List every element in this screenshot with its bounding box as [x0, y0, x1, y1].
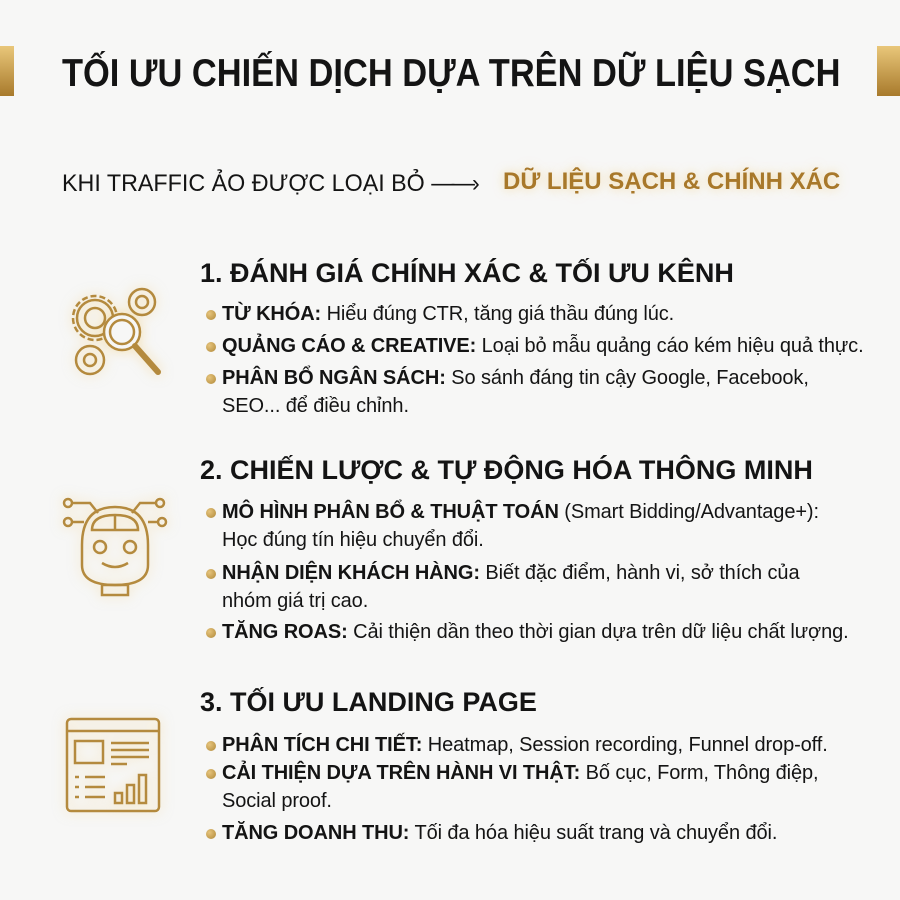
icon: browser dashboard	[60, 714, 166, 817]
icon: gears and magnifier	[68, 284, 164, 379]
section 2	[60, 454, 849, 643]
heading 1: 1. ĐÁNH GIÁ CHÍNH XÁC & TỐI ƯU KÊNH	[200, 258, 734, 288]
section 2: NHẬN DIỆN KHÁCH HÀNG: Biết đặc điểm, hành vi, sở thích của	[222, 562, 799, 584]
gold bar left	[0, 46, 14, 96]
section 3: Social proof.	[222, 790, 332, 812]
subtitle	[62, 164, 841, 197]
section 3: TĂNG DOANH THU: Tối đa hóa hiệu suất trang và chuyển đổi.	[222, 822, 777, 844]
heading 3: 3. TỐI ƯU LANDING PAGE	[200, 687, 537, 717]
section 1: PHÂN BỔ NGÂN SÁCH: So sánh đáng tin cậy Google, Facebook,	[222, 367, 809, 389]
bullets 2	[206, 500, 849, 643]
bullets 1	[206, 302, 864, 417]
section 2: nhóm giá trị cao.	[222, 590, 368, 612]
section 2: MÔ HÌNH PHÂN BỔ & THUẬT TOÁN (Smart Bidding/Advantage+):	[222, 501, 819, 523]
section 1	[68, 258, 864, 417]
subtitle: DỮ LIỆU SẠCH & CHÍNH XÁC	[503, 168, 840, 195]
section 3: PHÂN TÍCH CHI TIẾT: Heatmap, Session recording, Funnel drop-off.	[222, 734, 828, 756]
section 1: TỪ KHÓA: Hiểu đúng CTR, tăng giá thầu đúng lúc.	[222, 303, 674, 325]
icon: robot brain	[60, 494, 170, 601]
section 2: Học đúng tín hiệu chuyển đổi.	[222, 529, 484, 551]
section 1: SEO... để điều chỉnh.	[222, 395, 409, 417]
subtitle: KHI TRAFFIC ẢO ĐƯỢC LOẠI BỎ ——›	[62, 170, 477, 197]
heading 2: 2. CHIẾN LƯỢC & TỰ ĐỘNG HÓA THÔNG MINH	[200, 455, 813, 485]
section 2: TĂNG ROAS: Cải thiện dần theo thời gian dựa trên dữ liệu chất lượng.	[222, 621, 849, 643]
title: TỐI ƯU CHIẾN DỊCH DỰA TRÊN DỮ LIỆU SẠCH	[62, 52, 841, 95]
bullets 3	[206, 732, 828, 844]
section 3	[60, 687, 828, 844]
section 1: QUẢNG CÁO & CREATIVE: Loại bỏ mẫu quảng cáo kém hiệu quả thực.	[222, 335, 864, 357]
gold bar right	[877, 46, 900, 96]
section 3: CẢI THIỆN DỰA TRÊN HÀNH VI THẬT: Bố cục, Form, Thông điệp,	[222, 762, 818, 784]
